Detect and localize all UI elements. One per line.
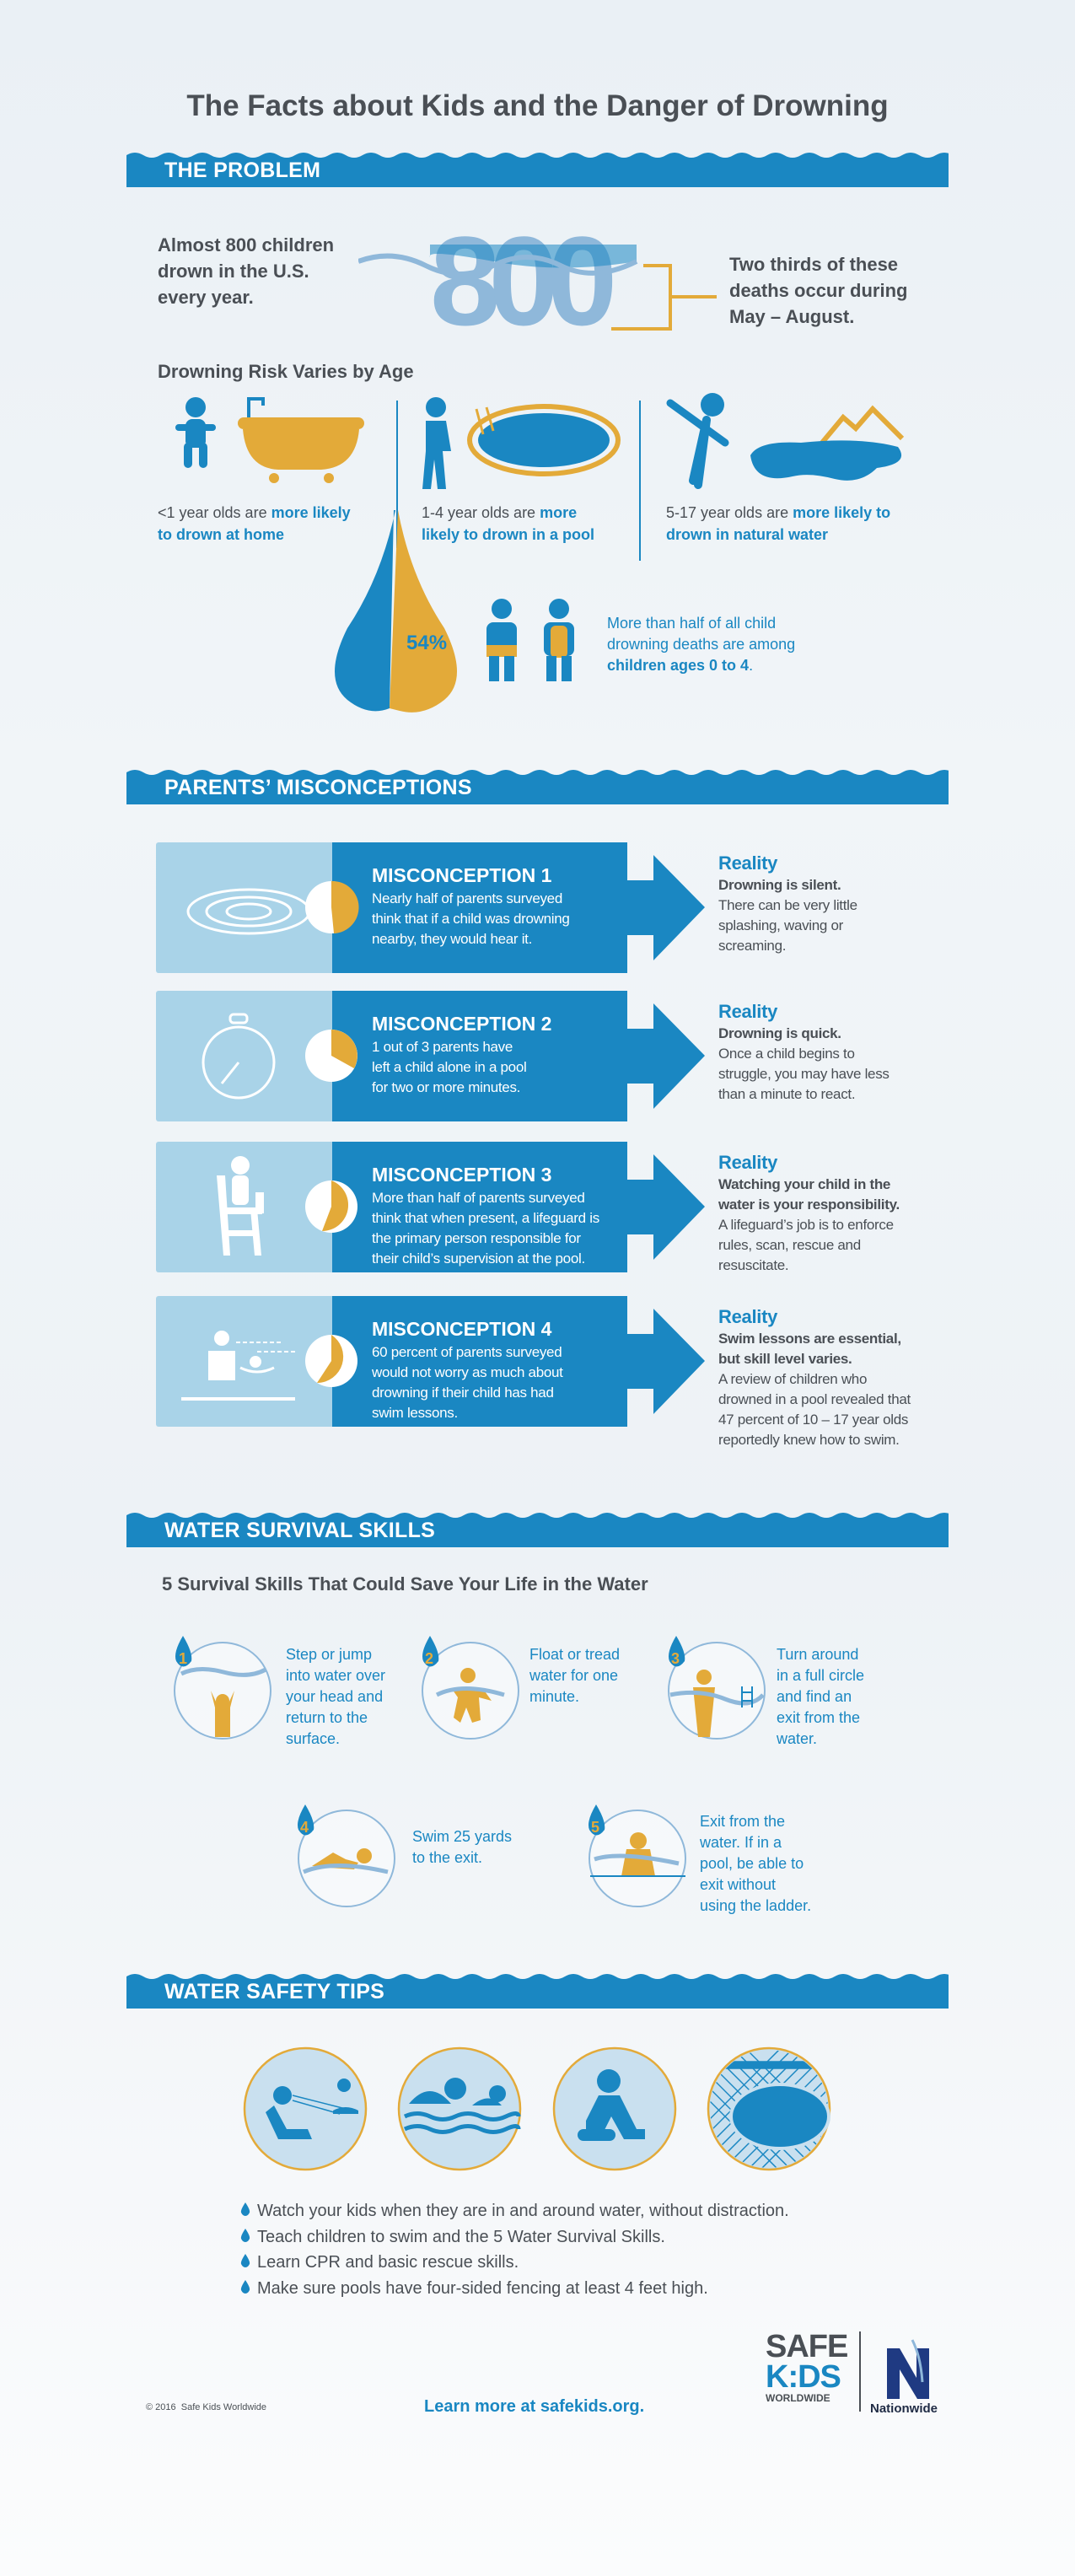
text: reality 3: Watching your child in the — [718, 1176, 890, 1192]
text: reality 3: A lifeguard’s job is to enforce — [718, 1217, 894, 1233]
logo: safe kids: K:DS — [766, 2359, 841, 2395]
list: safety tips: Make sure pools have four-sided fencing at least 4 feet high. — [257, 2278, 708, 2297]
text: skill 1: return to the — [286, 1709, 368, 1726]
text: two thirds — [729, 254, 907, 327]
text: almost 800: Almost 800 children — [158, 234, 334, 255]
text: skill 3 — [777, 1646, 864, 1747]
text: skill 3: in a full circle — [777, 1667, 864, 1684]
text: skill 4: Swim 25 yards — [412, 1828, 512, 1845]
panel: misconception 1: Nearly half of parents surveyed — [372, 890, 562, 906]
text: 5-17 year olds are more likely to — [666, 504, 890, 521]
panel: misconception 4 — [156, 1296, 705, 1427]
captions: age groups: to drown at home — [158, 526, 284, 543]
panel: misconception 2: left a child alone in a pool — [372, 1059, 526, 1075]
banner: water safety tips: WATER SAFETY TIPS — [164, 1980, 384, 2003]
text: reality 2 — [718, 1001, 890, 1102]
panel: misconception 1 — [156, 842, 705, 973]
text: skill 3: exit from the — [777, 1709, 860, 1726]
text: reality 4: A review of children who — [718, 1371, 867, 1387]
text: reality 4: Reality — [718, 1306, 777, 1327]
panel: misconception 4: drowning if their child has had — [372, 1385, 554, 1401]
icon: skill 4: 4 — [300, 1819, 309, 1836]
text: reality 2: Once a child begins to — [718, 1046, 855, 1062]
panel: misconception 3: MISCONCEPTION 3 — [372, 1164, 551, 1186]
text: more than half: drowning deaths are among — [607, 636, 795, 653]
text: skill 1 — [286, 1646, 385, 1747]
icon: skill 5 — [589, 1804, 686, 1907]
text: reality 4: 47 percent of 10 – 17 year olds — [718, 1412, 908, 1428]
text: skill 4 — [412, 1828, 512, 1866]
text: more than half: children ages 0 to 4. — [607, 657, 753, 674]
text: skill 2 — [529, 1646, 620, 1705]
text: reality 1: screaming. — [718, 938, 786, 954]
text: skill 5: pool, be able to — [700, 1855, 804, 1872]
text: skill 2: Float or tread — [529, 1646, 620, 1663]
text: skill 1: surface. — [286, 1730, 340, 1747]
banner: water survival skills: WATER SURVIVAL SKILLS — [164, 1519, 435, 1542]
text: skill 1: Step or jump — [286, 1646, 372, 1663]
graphic: 800 — [358, 215, 717, 333]
panel: misconception 1: think that if a child was drowning — [372, 911, 570, 927]
text: two thirds: May – August. — [729, 306, 854, 327]
panel: misconception 3: More than half of parents surveyed — [372, 1190, 585, 1206]
text: reality 1 — [718, 852, 857, 954]
text: more than half: More than half of all child — [607, 615, 776, 632]
text: skill 5: water. If in a — [700, 1834, 782, 1851]
text: reality 2: Reality — [718, 1001, 777, 1022]
panel: misconception 4: swim lessons. — [372, 1405, 458, 1421]
text: reality 4: reportedly knew how to swim. — [718, 1432, 900, 1448]
panel: misconception 1: nearby, they would hear it. — [372, 931, 532, 947]
icon: baby and bathtub — [175, 397, 364, 483]
icon: skill 1 — [174, 1636, 271, 1740]
panel: misconception 4: 60 percent of parents surveyed — [372, 1344, 562, 1360]
text: skill 3: water. — [777, 1730, 817, 1747]
icon: child and natural water — [666, 393, 904, 489]
icon: skill 4 — [298, 1804, 395, 1907]
text: reality 2: than a minute to react. — [718, 1086, 855, 1102]
text: skill 2: water for one — [529, 1667, 618, 1684]
text: skill 3: and find an — [777, 1688, 852, 1705]
panel: misconception 3: their child’s supervision at the pool. — [372, 1250, 585, 1266]
text: reality 4: but skill level varies. — [718, 1351, 852, 1367]
text: reality 3: rules, scan, rescue and — [718, 1237, 861, 1253]
text: two thirds: deaths occur during — [729, 280, 907, 301]
logo: nationwide: Nationwide — [870, 2401, 938, 2416]
text: skill 2: minute. — [529, 1688, 579, 1705]
icon: two kids — [486, 599, 574, 681]
text: almost 800: drown in the U.S. — [158, 261, 309, 282]
footer: copyright: © 2016 Safe Kids Worldwide — [146, 2402, 266, 2412]
text: reality 2: struggle, you may have less — [718, 1066, 890, 1082]
text: reality 1: Reality — [718, 852, 777, 874]
logo: safe kids — [766, 2329, 847, 2404]
panel: misconception 2: MISCONCEPTION 2 — [372, 1013, 551, 1035]
chart: 54% drop: 54% — [406, 632, 447, 654]
text: skill 5: exit without — [700, 1876, 776, 1893]
text: skill 5: using the ladder. — [700, 1897, 811, 1914]
text: drown in natural water — [666, 526, 828, 543]
captions: age groups — [158, 504, 351, 543]
icon: skill 3: 3 — [671, 1650, 680, 1667]
icon: skill 5: 5 — [591, 1819, 599, 1836]
panel: misconception 2 — [156, 991, 705, 1121]
text: reality 1: splashing, waving or — [718, 917, 843, 933]
list: safety tips: Learn CPR and basic rescue skills. — [257, 2253, 519, 2272]
chart: 54% drop — [335, 510, 457, 713]
icon: toddler and pool — [422, 397, 621, 489]
banner: water survival skills — [126, 1513, 949, 1547]
title: The Facts about Kids and the Danger of Drowning — [186, 89, 889, 122]
panel: misconception 3 — [156, 1142, 705, 1272]
text: skill 1: into water over — [286, 1667, 385, 1684]
text: more than half — [607, 615, 795, 674]
text: reality 1: Drowning is silent. — [718, 877, 841, 893]
banner: the problem — [126, 153, 949, 187]
text: almost 800 — [158, 234, 334, 308]
text: almost 800: every year. — [158, 287, 254, 308]
text: skill 4: to the exit. — [412, 1849, 482, 1866]
text: reality 4: drowned in a pool revealed that — [718, 1391, 911, 1407]
icon: skill 2: 2 — [425, 1650, 433, 1667]
panel: misconception 4: would not worry as much about — [372, 1364, 563, 1380]
text: skill 1: your head and — [286, 1688, 383, 1705]
panel: misconception 2: 1 out of 3 parents have — [372, 1039, 513, 1055]
banner: misconceptions — [126, 770, 949, 804]
text: skill 3: Turn around — [777, 1646, 858, 1663]
text: reality 4 — [718, 1306, 911, 1448]
divider lines — [396, 401, 398, 548]
heading: 5 survival skills: 5 Survival Skills That Could Save Your Life in the Water — [162, 1573, 648, 1595]
text: reality 3: water is your responsibility. — [718, 1197, 900, 1213]
panel: misconception 3: the primary person responsible for — [372, 1230, 581, 1246]
icons: safety tips — [243, 2047, 831, 2170]
text: reality 3: Reality — [718, 1152, 777, 1173]
banner: the problem: THE PROBLEM — [164, 159, 320, 182]
list: safety tips: Teach children to swim and the 5 Water Survival Skills. — [257, 2228, 665, 2246]
list: safety tips: Watch your kids when they are in and around water, without distraction. — [257, 2202, 789, 2220]
text: reality 3: resuscitate. — [718, 1257, 788, 1273]
text: reality 2: Drowning is quick. — [718, 1025, 841, 1041]
logo: safe kids: SAFE — [766, 2329, 847, 2364]
text: reality 1: There can be very little — [718, 897, 857, 913]
icon: skill 2 — [422, 1636, 519, 1740]
panel: misconception 1: MISCONCEPTION 1 — [372, 864, 551, 886]
text: skill 5 — [700, 1813, 811, 1914]
text: two thirds: Two thirds of these — [729, 254, 898, 275]
list: safety tips — [241, 2202, 789, 2297]
panel: misconception 4: MISCONCEPTION 4 — [372, 1318, 551, 1340]
panel: misconception 2: for two or more minutes. — [372, 1079, 520, 1095]
text: reality 3 — [718, 1152, 900, 1273]
text: 1-4 year olds are more — [422, 504, 577, 521]
heading: drowning risk: Drowning Risk Varies by Age — [158, 361, 414, 382]
icon: skill 1: 1 — [179, 1650, 187, 1667]
logo: safe kids: WORLDWIDE — [766, 2392, 830, 2404]
banner: misconceptions: PARENTS’ MISCONCEPTIONS — [164, 776, 472, 799]
text: likely to drown in a pool — [422, 526, 594, 543]
captions: age groups: <1 year olds are more likely — [158, 504, 351, 521]
text: reality 4: Swim lessons are essential, — [718, 1331, 901, 1347]
banner: water safety tips — [126, 1974, 949, 2009]
footer: learn more: Learn more at safekids.org. — [424, 2397, 644, 2416]
text: skill 5: Exit from the — [700, 1813, 785, 1830]
icon: skill 3 — [668, 1636, 766, 1740]
logo: nationwide — [870, 2339, 938, 2416]
panel: misconception 3: think that when present, a lifeguard is — [372, 1210, 599, 1226]
